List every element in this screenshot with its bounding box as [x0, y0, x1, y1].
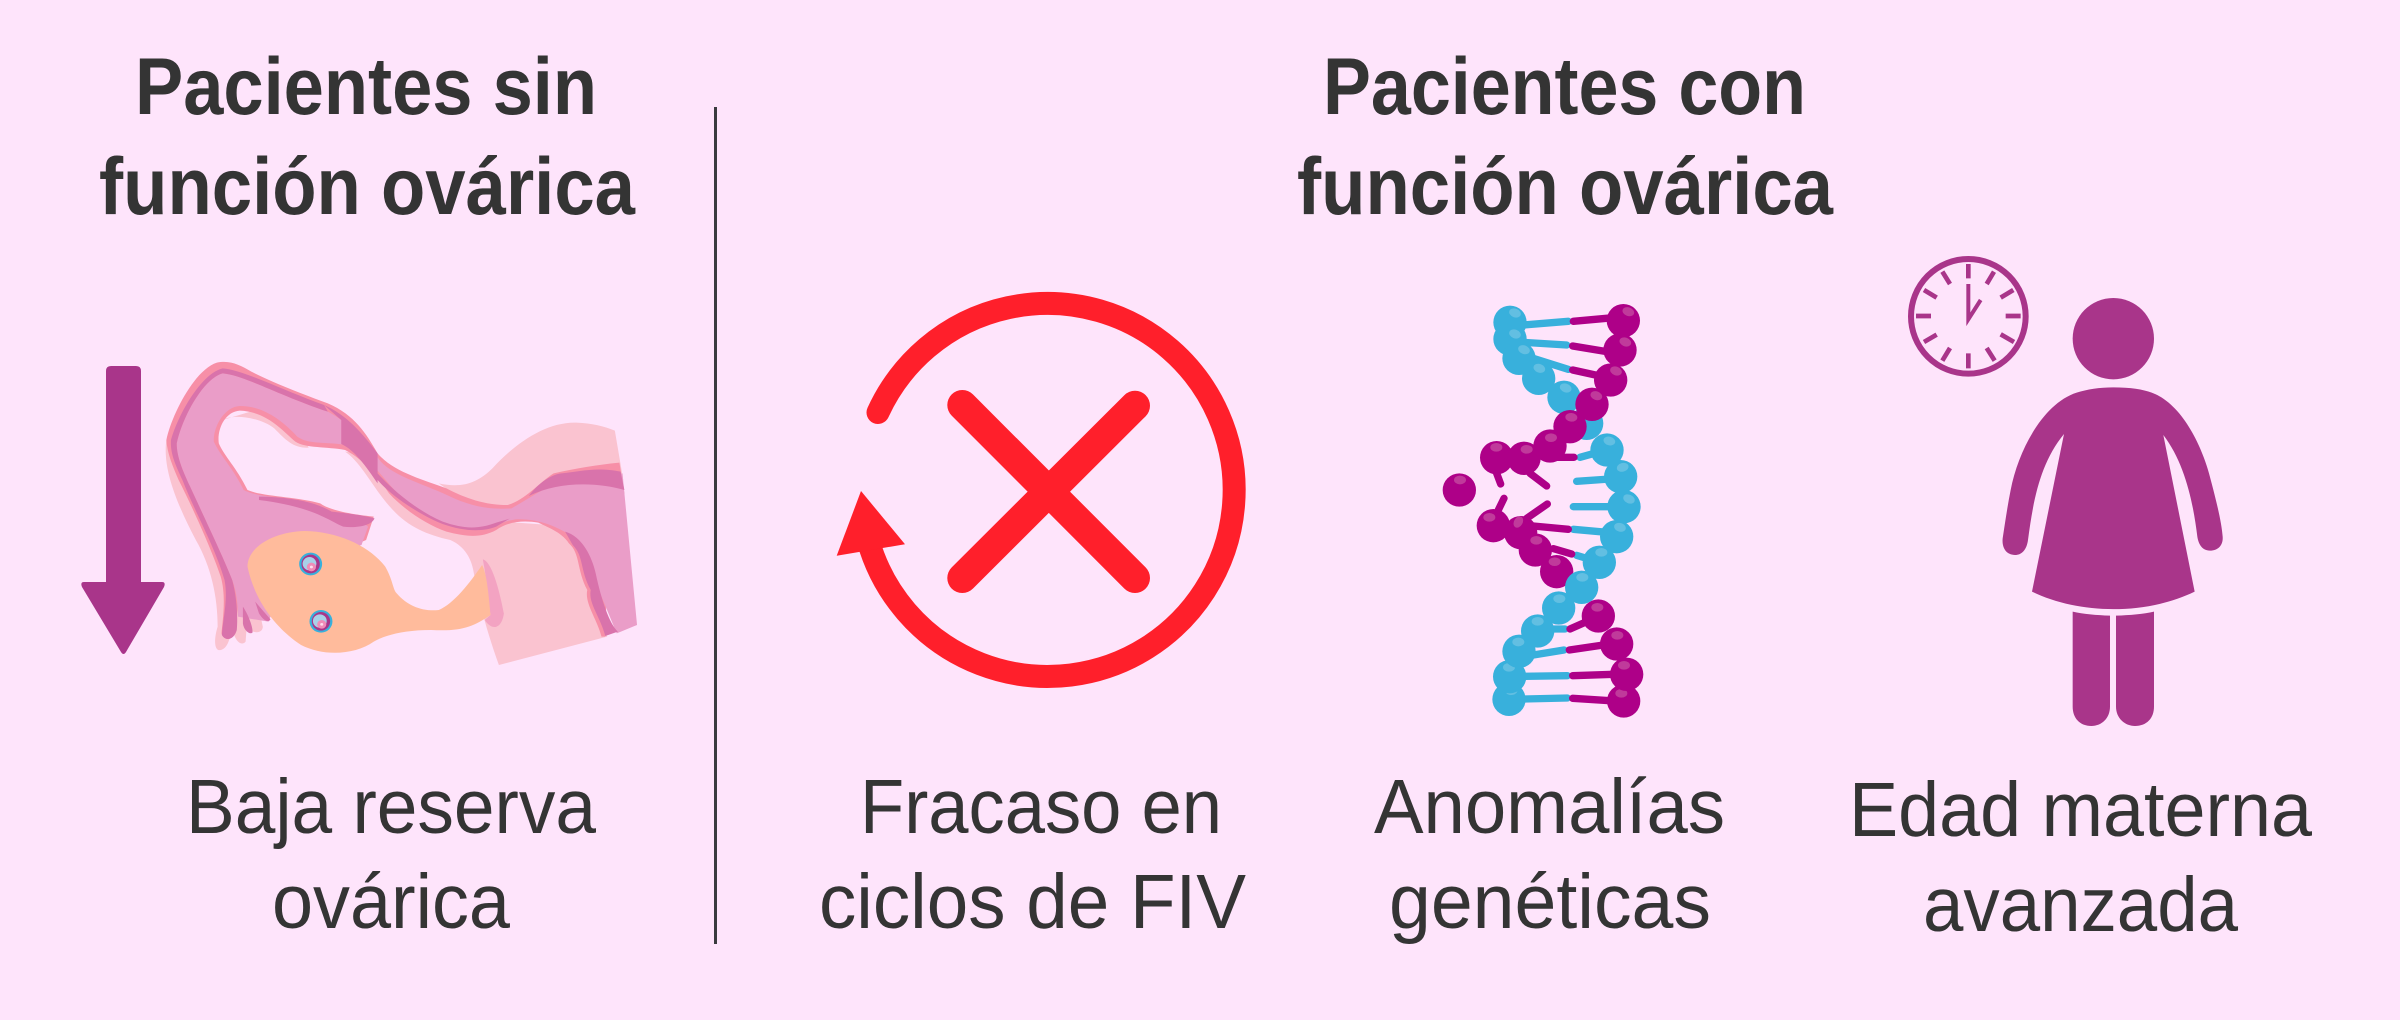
follicle	[309, 610, 332, 633]
follicle	[299, 553, 322, 575]
dark wall bands	[171, 368, 624, 639]
icon: woman figure	[2003, 298, 2223, 726]
tube border	[166, 362, 624, 639]
blue strand, upper	[1493, 306, 1603, 440]
left shadow and fimbriae	[166, 407, 368, 650]
heading: pacientes con función ovárica	[1297, 42, 1834, 232]
heading: pacientes sin función ovárica: Pacientes sin	[135, 42, 597, 132]
icon: DNA helix with damage	[1443, 304, 1643, 718]
heading: pacientes sin función ovárica: función ovárica	[99, 142, 636, 232]
label: edad materna avanzada: avanzada	[1923, 862, 2238, 948]
label: fracaso en ciclos de FIV: Fracaso en	[860, 764, 1222, 850]
ovary	[247, 531, 490, 653]
blue strand, centre	[1565, 546, 1616, 604]
tube main wall	[177, 373, 637, 633]
icon: failed cycle, circular arrow with cross	[837, 303, 1234, 676]
label: anomalías genéticas	[1374, 764, 1725, 945]
label: edad materna avanzada: Edad materna	[1849, 767, 2312, 853]
icon: uterus and ovary	[166, 362, 637, 665]
heading: pacientes con función ovárica: Pacientes con	[1323, 42, 1806, 132]
blue strand, lower	[1492, 433, 1641, 716]
label: baja reserva ovárica: ovárica	[272, 859, 510, 945]
icon: down arrow	[81, 366, 165, 654]
magenta strand, upper	[1443, 304, 1640, 507]
back tissue	[345, 423, 623, 665]
base pair rods	[1497, 318, 1613, 701]
heading: pacientes sin función ovárica	[99, 42, 636, 232]
label: baja reserva ovárica: Baja reserva	[186, 764, 596, 850]
divider line	[714, 107, 717, 944]
label: baja reserva ovárica	[186, 764, 596, 945]
magenta strand, lower	[1477, 509, 1643, 718]
label: fracaso en ciclos de FIV	[819, 764, 1247, 945]
label: fracaso en ciclos de FIV: ciclos de FIV	[819, 859, 1247, 945]
label: anomalías genéticas: genéticas	[1389, 859, 1711, 945]
heading: pacientes con función ovárica: función ovárica	[1297, 142, 1834, 232]
label: edad materna avanzada	[1849, 767, 2312, 948]
cervix stipple	[483, 559, 504, 627]
label: anomalías genéticas: Anomalías	[1374, 764, 1725, 850]
icon: clock	[1911, 259, 2026, 374]
